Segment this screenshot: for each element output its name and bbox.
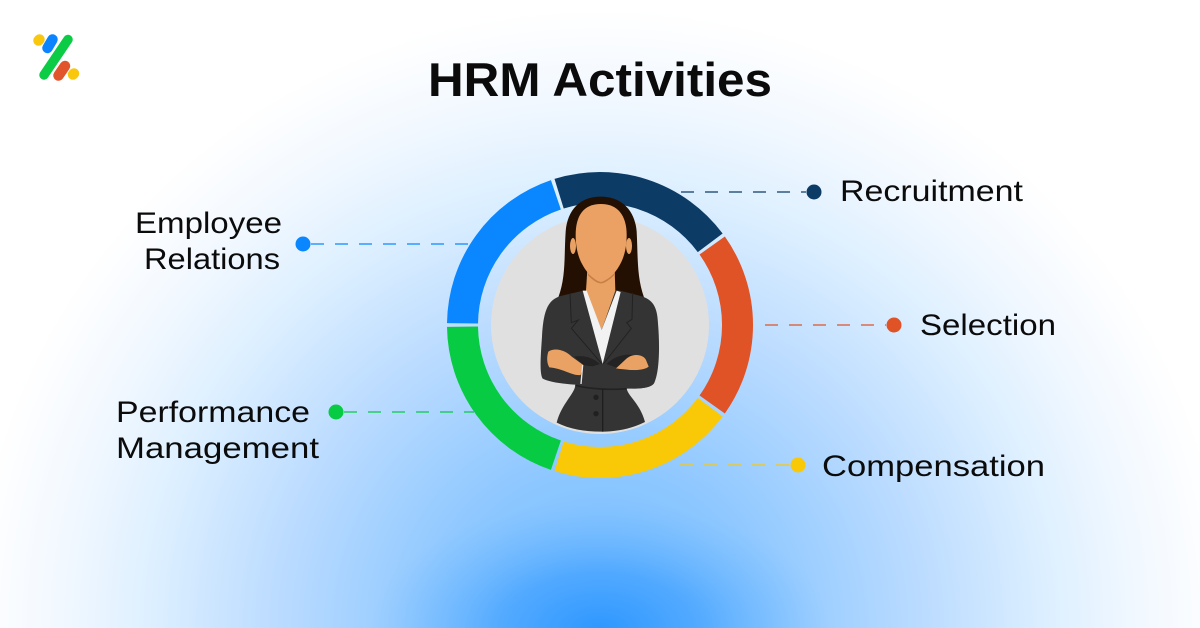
waist seam bbox=[575, 385, 627, 389]
callout: recruitment bbox=[681, 175, 1023, 208]
segment: performance management bbox=[462, 327, 556, 455]
callout: performance management: Management bbox=[116, 432, 319, 465]
callout: employee relations: Relations bbox=[144, 243, 280, 276]
blouse bbox=[583, 291, 621, 364]
callout: selection: Selection bbox=[920, 309, 1056, 342]
jacket front line bbox=[601, 389, 605, 432]
callout: compensation: Compensation bbox=[822, 450, 1045, 483]
right hand bbox=[616, 355, 649, 370]
donut chart bbox=[462, 187, 738, 463]
cuff bbox=[581, 365, 583, 384]
neck bbox=[586, 270, 615, 330]
center circle bbox=[491, 216, 709, 434]
lapels bbox=[570, 293, 633, 364]
logo bbox=[38, 40, 74, 76]
buttons bbox=[593, 395, 599, 400]
callout: selection bbox=[765, 309, 1056, 342]
left hand bbox=[547, 350, 583, 375]
dark shadow under arms bbox=[574, 355, 633, 368]
callout: employee relations bbox=[135, 207, 468, 276]
hair bbox=[558, 197, 644, 297]
illustration: businesswoman bbox=[541, 197, 659, 432]
title: HRM Activities bbox=[428, 53, 772, 106]
callout: performance management bbox=[116, 396, 474, 465]
segment: employee relations bbox=[462, 195, 556, 323]
callout: performance management: Performance bbox=[116, 396, 310, 429]
callout: compensation bbox=[680, 450, 1045, 483]
callout: recruitment: Recruitment bbox=[840, 175, 1023, 208]
jacket body bbox=[541, 291, 659, 432]
face bbox=[576, 204, 627, 281]
segment: selection bbox=[712, 246, 738, 404]
jaw shadow bbox=[588, 273, 614, 283]
segment: recruitment bbox=[559, 187, 710, 243]
segment: compensation bbox=[559, 407, 710, 463]
callout: employee relations: Employee bbox=[135, 207, 282, 240]
folded arm bbox=[581, 365, 654, 389]
ears bbox=[570, 238, 576, 254]
